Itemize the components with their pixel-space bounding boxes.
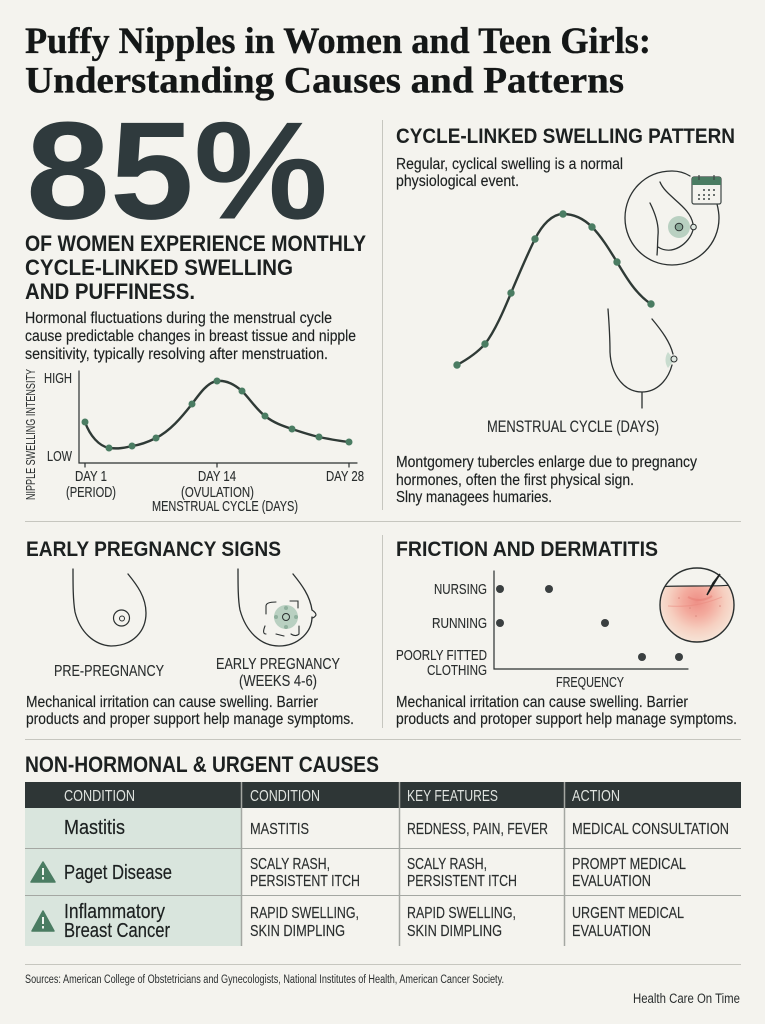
icon: calendar bbox=[692, 175, 721, 204]
table bbox=[25, 782, 741, 946]
row: paget disease: PERSISTENT ITCH bbox=[250, 873, 360, 890]
body text bbox=[26, 694, 354, 728]
table header bbox=[25, 782, 741, 808]
panel: key statistic bbox=[24, 94, 366, 515]
dot plot: frequency by cause: RUNNING bbox=[432, 615, 487, 632]
credit: Health Care On Time bbox=[633, 991, 740, 1006]
panel: early pregnancy signs bbox=[26, 538, 354, 728]
row: paget disease: SCALY RASH, bbox=[250, 856, 330, 873]
dot plot: frequency by cause: NURSING bbox=[434, 581, 487, 598]
row: paget disease: Paget Disease bbox=[64, 861, 172, 884]
row: inflammatory breast cancer: RAPID SWELLING, bbox=[250, 905, 359, 922]
note text: hormones, often the first physical sign. bbox=[396, 472, 634, 489]
intro text bbox=[396, 156, 623, 190]
note text bbox=[396, 454, 697, 506]
line chart: swelling intensity by cycle day: DAY 28 bbox=[326, 468, 364, 485]
intro text: physiological event. bbox=[396, 173, 519, 190]
heading: FRICTION AND DERMATITIS bbox=[396, 538, 658, 561]
body text bbox=[396, 694, 737, 728]
table header: CONDITION bbox=[250, 788, 320, 805]
row: mastitis: Mastitis bbox=[64, 816, 125, 839]
sources: Sources: American College of Obstetricians and Gynecologists, National Institutes of Health, American Cancer Society. bbox=[25, 974, 504, 986]
heading: EARLY PREGNANCY SIGNS bbox=[26, 538, 281, 561]
line chart: swelling intensity by cycle day: DAY 14 bbox=[198, 468, 236, 485]
icon: magnified skin irritation bbox=[655, 565, 735, 642]
row: paget disease: SCALY RASH, bbox=[407, 856, 487, 873]
title: Understanding Causes and Patterns bbox=[25, 60, 624, 102]
icon: warning triangle bbox=[31, 862, 55, 882]
statistic caption: CYCLE-LINKED SWELLING bbox=[25, 255, 293, 280]
intro text: Regular, cyclical swelling is a normal bbox=[396, 156, 623, 173]
note text: Montgomery tubercles enlarge due to pregnancy bbox=[396, 454, 697, 471]
row: paget disease bbox=[31, 856, 686, 890]
row: inflammatory breast cancer: Inflammatory bbox=[64, 900, 166, 923]
title: Puffy Nipples in Women and Teen Girls: bbox=[25, 21, 651, 62]
dot plot: frequency by cause bbox=[396, 571, 688, 691]
statistic description: sensitivity, typically resolving after menstruation. bbox=[25, 346, 328, 363]
icon: warning triangle bbox=[32, 911, 54, 931]
statistic description: cause predictable changes in breast tissue and nipple bbox=[25, 328, 356, 345]
row: paget disease: PROMPT MEDICAL bbox=[572, 856, 686, 873]
dot plot: frequency by cause: POORLY FITTED bbox=[396, 647, 487, 664]
table header: KEY FEATURES bbox=[407, 788, 498, 805]
panel: friction and dermatitis bbox=[396, 538, 737, 728]
panel: non-hormonal and urgent causes bbox=[25, 752, 741, 946]
line chart: swelling intensity by cycle day: NIPPLE SWELLING INTENSITY bbox=[24, 369, 38, 500]
statistic description: Hormonal fluctuations during the menstrual cycle bbox=[25, 310, 332, 327]
row: inflammatory breast cancer: URGENT MEDICAL bbox=[572, 905, 684, 922]
bell curve chart bbox=[453, 210, 655, 369]
row: inflammatory breast cancer: EVALUATION bbox=[572, 923, 651, 940]
row: mastitis: MEDICAL CONSULTATION bbox=[572, 821, 729, 838]
title bbox=[25, 21, 651, 102]
label: (WEEKS 4-6) bbox=[239, 673, 317, 690]
line chart: swelling intensity by cycle day: MENSTRUAL CYCLE (DAYS) bbox=[152, 498, 298, 515]
row: inflammatory breast cancer: SKIN DIMPLING bbox=[250, 923, 345, 940]
row: paget disease: PERSISTENT ITCH bbox=[407, 873, 517, 890]
label: PRE-PREGNANCY bbox=[54, 663, 164, 680]
statistic description bbox=[25, 310, 356, 363]
line chart: swelling intensity by cycle day: (OVULATION) bbox=[181, 484, 254, 501]
row: mastitis bbox=[64, 816, 729, 839]
statistic caption bbox=[25, 231, 366, 304]
note text: Slny managees humaries. bbox=[396, 489, 552, 506]
panel: cycle-linked swelling pattern bbox=[396, 125, 735, 506]
dot plot: frequency by cause: FREQUENCY bbox=[556, 674, 624, 691]
icon: breast detail in circle bbox=[625, 171, 719, 265]
illustration: pre-pregnancy breast bbox=[73, 569, 146, 646]
label: EARLY PREGNANCY bbox=[216, 656, 340, 673]
heading: NON-HORMONAL & URGENT CAUSES bbox=[25, 752, 379, 777]
line chart: swelling intensity by cycle day: (PERIOD) bbox=[66, 484, 116, 501]
line chart: swelling intensity by cycle day: LOW bbox=[47, 448, 73, 465]
statistic caption: OF WOMEN EXPERIENCE MONTHLY bbox=[25, 231, 366, 256]
big number 85%: 85% bbox=[26, 94, 328, 248]
body text: products and proper support help manage symptoms. bbox=[26, 711, 354, 728]
statistic caption: AND PUFFINESS. bbox=[25, 279, 195, 304]
chart axis label: MENSTRUAL CYCLE (DAYS) bbox=[487, 417, 659, 436]
row: paget disease: EVALUATION bbox=[572, 873, 651, 890]
body text: Mechanical irritation can cause swelling. Barrier bbox=[396, 694, 689, 711]
row: inflammatory breast cancer: SKIN DIMPLING bbox=[407, 923, 502, 940]
row: inflammatory breast cancer: Breast Cancer bbox=[64, 919, 170, 942]
line chart: swelling intensity by cycle day bbox=[24, 369, 364, 515]
dot plot: frequency by cause: CLOTHING bbox=[427, 662, 487, 679]
row: inflammatory breast cancer bbox=[32, 900, 684, 942]
label bbox=[216, 656, 340, 690]
line chart: swelling intensity by cycle day: HIGH bbox=[44, 370, 72, 387]
row: inflammatory breast cancer: RAPID SWELLING, bbox=[407, 905, 516, 922]
row: mastitis: REDNESS, PAIN, FEVER bbox=[407, 821, 548, 838]
row: mastitis: MASTITIS bbox=[250, 821, 309, 838]
line chart: swelling intensity by cycle day: DAY 1 bbox=[75, 468, 107, 485]
illustration: early pregnancy breast bbox=[238, 569, 316, 646]
body text: Mechanical irritation can cause swelling. Barrier bbox=[26, 694, 319, 711]
table header: CONDITION bbox=[64, 788, 135, 805]
icon: breast side profile bbox=[608, 309, 677, 408]
heading: CYCLE-LINKED SWELLING PATTERN bbox=[396, 125, 735, 148]
table header: ACTION bbox=[572, 788, 620, 805]
